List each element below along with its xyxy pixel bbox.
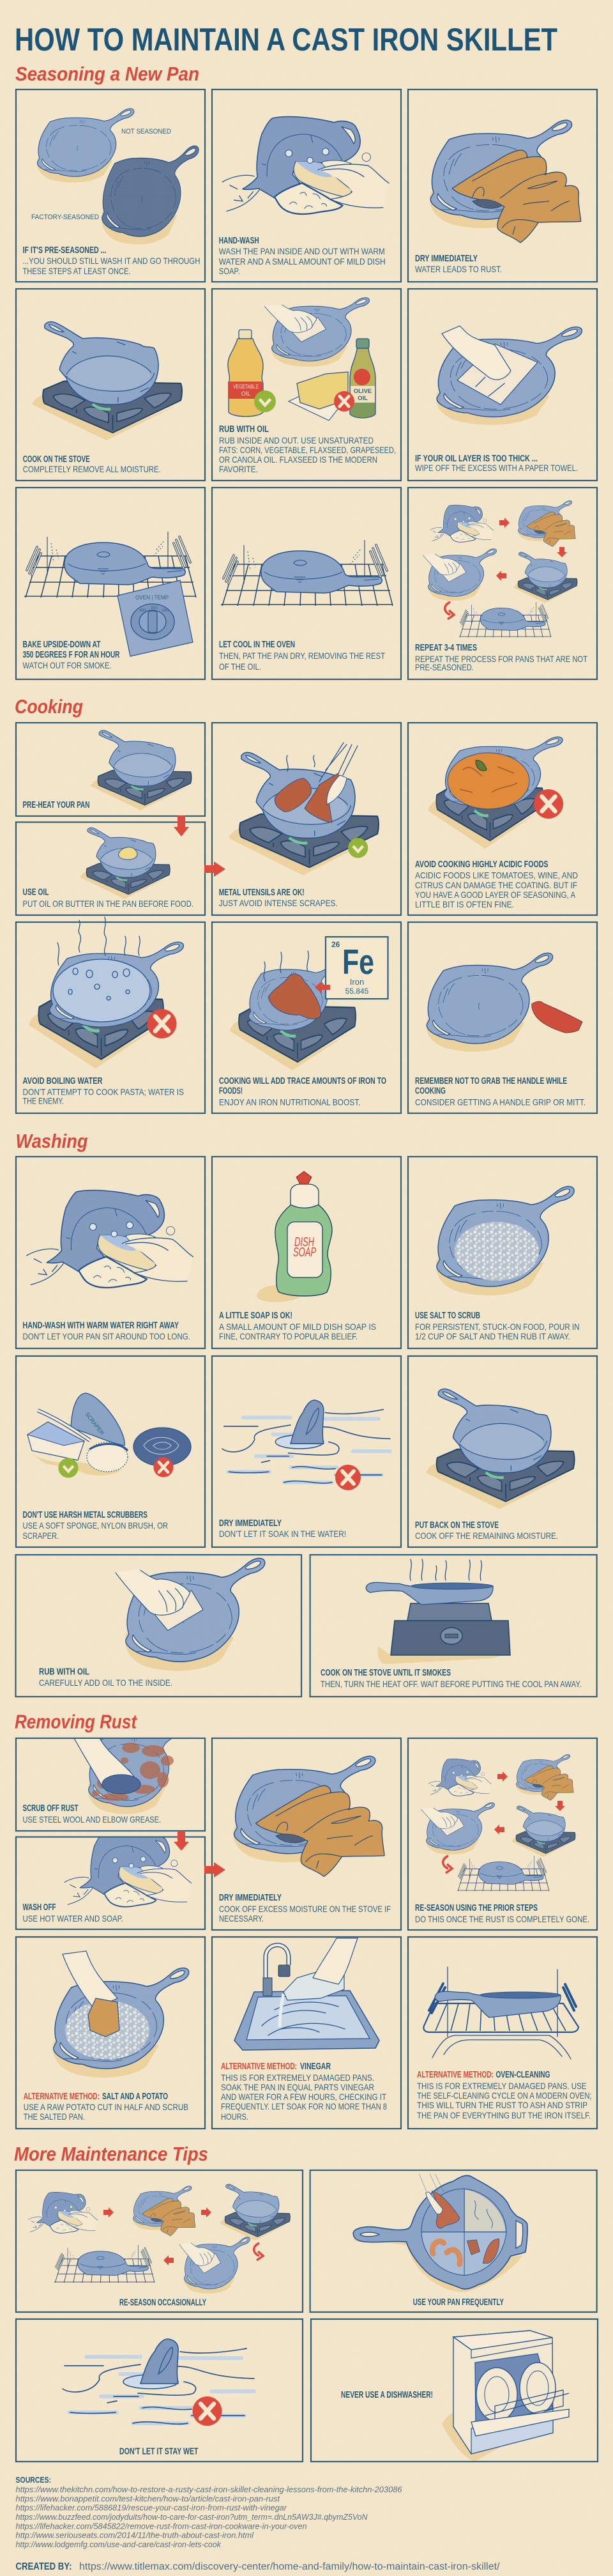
- text: salt: USE SALT TO SCRUB: [415, 1311, 480, 1321]
- text: pre-seasoned step: THESE STEPS AT LEAST ONCE.: [23, 266, 130, 276]
- illustration: oven temperature card: 400: [139, 608, 146, 613]
- text: bake step: WATCH OUT FOR SMOKE.: [23, 660, 111, 670]
- text: oil step: [23, 887, 193, 909]
- illustration: scrubbing a rusty pan: [74, 1739, 174, 1814]
- panel: use oil: [16, 822, 205, 915]
- text: soap: A LITTLE SOAP IS OK!: [219, 1311, 292, 1321]
- text: boiling water: THE ENEMY.: [23, 1095, 64, 1106]
- text: metal utensils: [219, 888, 338, 908]
- text: hand-wash step: WASH THE PAN INSIDE AND OUT WITH WARM: [219, 246, 385, 256]
- text: dry: [219, 1893, 391, 1924]
- text: scrubbers: DON'T USE HARSH METAL SCRUBBERS: [23, 1510, 148, 1520]
- panel: dry immediately: [408, 89, 597, 282]
- text: boiling water: DON'T ATTEMPT TO COOK PASTA; WATER IS: [23, 1086, 184, 1097]
- illustration: tomato sauce in pan on stove: [428, 737, 563, 849]
- text: handle warning: CONSIDER GETTING A HANDLE GRIP OR MITT.: [415, 1097, 586, 1107]
- illustration: pan smoking on stove: [366, 1559, 510, 1664]
- arrow: right to dry: [204, 1862, 225, 1878]
- text: iron benefit: COOKING WILL ADD TRACE AMOUNTS OF IRON TO: [219, 1076, 386, 1086]
- text: repeat step: [415, 643, 587, 672]
- illustration: pan handle sticking out of water: [222, 1400, 390, 1483]
- icon: red x: [153, 1457, 174, 1477]
- panel: cook until it smokes: [310, 1555, 597, 1697]
- panel: scrub off rust: [15, 1737, 206, 1832]
- text: re-season occasionally: RE-SEASON OCCASIONALLY: [119, 2298, 206, 2308]
- text: vinegar: [221, 2062, 387, 2122]
- icon: dish soap bottle: [257, 1171, 332, 1302]
- text: iron benefit: ENJOY AN IRON NUTRITIONAL BOOST.: [219, 1097, 360, 1107]
- text: oil layer step: [415, 454, 578, 473]
- illustration: pan on stove: [426, 1389, 575, 1509]
- text: oven-cleaning: ALTERNATIVE METHOD:: [417, 2070, 494, 2080]
- icon: green check: [348, 838, 368, 858]
- illustration: towel drying pan: [234, 1756, 384, 1876]
- periodic table element: iron: Iron: [350, 977, 364, 987]
- created by credit: CREATED BY:: [15, 2561, 72, 2572]
- text: hand-wash: [23, 1320, 190, 1341]
- text: rub: CAREFULLY ADD OIL TO THE INSIDE.: [39, 1677, 172, 1688]
- illustration: food and tongs in pan on stove: [229, 743, 379, 875]
- illustration: boiling water in pan on stove: [29, 917, 183, 1068]
- text: cool step: LET COOL IN THE OVEN: [219, 640, 295, 650]
- text: rub: RUB WITH OIL: [39, 1667, 89, 1677]
- sources list: https://www.bonappetit.com/test-kitchen/how-to/article/cast-iron-pan-rust: [15, 2494, 280, 2503]
- text: repeat step: REPEAT 3-4 TIMES: [415, 643, 477, 653]
- panel: hand-wash right away: [16, 1157, 205, 1348]
- text: scrub: USE STEEL WOOL AND ELBOW GREASE.: [23, 1814, 161, 1824]
- illustration: oven temperature card: [117, 580, 193, 656]
- panel: re-season occasionally: [16, 2170, 303, 2312]
- text: dry: COOK OFF EXCESS MOISTURE ON THE STOVE IF: [219, 1904, 391, 1914]
- icon: butter block: [289, 372, 348, 420]
- panel: a little soap: [212, 1157, 401, 1348]
- sources list: https://lifehacker.com/5845822/remove-rust-from-cast-iron-cookware-in-your-oven: [15, 2522, 307, 2531]
- text: stay wet: DON'T LET IT STAY WET: [119, 2446, 199, 2456]
- panel: re-season: [408, 1738, 597, 1930]
- text: cook until smoke: [321, 1668, 582, 1689]
- text: pre-heat: PRE-HEAT YOUR PAN: [23, 800, 89, 810]
- text: dry: DRY IMMEDIATELY: [219, 1893, 282, 1903]
- icon: olive oil bottle: OLIVE: [354, 388, 372, 395]
- panel: hand-wash: [212, 89, 401, 282]
- text: iron benefit: FOODS!: [219, 1086, 243, 1097]
- illustration: sink with vinegar being poured: [234, 1938, 379, 2050]
- text: dry step: WATER LEADS TO RUST.: [415, 264, 502, 274]
- icon: red x: [334, 391, 354, 412]
- text: bake step: [23, 640, 120, 670]
- text: potato: THE SALTED PAN.: [24, 2111, 85, 2122]
- text: scrubbers: USE A SOFT SPONGE, NYLON BRUSH, OR: [23, 1520, 168, 1531]
- illustration: pan upside-down on oven rack: [24, 532, 196, 598]
- text: repeat step: PRE-SEASONED.: [415, 662, 474, 672]
- illustration: scrubbing salted pan with a potato: [53, 1951, 189, 2078]
- text: oil step: OR CANOLA OIL. FLAXSEED IS THE MODERN: [219, 454, 377, 465]
- text: stove step: COMPLETELY REMOVE ALL MOISTURE.: [23, 464, 161, 474]
- text: vinegar: AND WATER FOR A FEW HOURS, CHECKING IT: [221, 2092, 386, 2102]
- illustration: not seasoned pan and factory seasoned pan: [37, 109, 199, 245]
- text: oil step: RUB INSIDE AND OUT. USE UNSATURATED: [219, 435, 374, 445]
- panel: use your pan frequently: [310, 2170, 597, 2312]
- text: soap: A SMALL AMOUNT OF MILD DISH SOAP IS: [219, 1322, 376, 1332]
- icon: dish soap bottle: DISH: [294, 1235, 314, 1249]
- periodic table element: iron: [326, 937, 388, 999]
- text: oil step: FAVORITE.: [219, 464, 258, 474]
- text: scrubbers: [23, 1510, 168, 1541]
- text: boiling water: AVOID BOILING WATER: [23, 1076, 103, 1086]
- text: acidic foods: AVOID COOKING HIGHLY ACIDIC FOODS: [415, 860, 549, 870]
- illustration: pan on stove burner: [33, 322, 182, 440]
- text: salt: 1/2 CUP OF SALT AND THEN RUB IT AWAY.: [415, 1331, 570, 1341]
- created by credit: https://www.titlemax.com/discovery-center/home-and-family/how-to-maintain-cast-iron-skillet/: [79, 2561, 500, 2572]
- panel: never use a dishwasher: [311, 2319, 598, 2462]
- text: vinegar: ALTERNATIVE METHOD:: [221, 2062, 297, 2072]
- panel: rub with oil: [212, 289, 401, 481]
- text: pre-seasoned step: IF IT'S PRE-SEASONED ...: [23, 245, 106, 256]
- illustration: dishwasher with plates: [442, 2331, 569, 2461]
- text: metal utensils: JUST AVOID INTENSE SCRAPES.: [219, 898, 338, 908]
- text: soap: [219, 1311, 376, 1341]
- icon: red handle mitt: [532, 1001, 582, 1033]
- text: pre-seasoned step: ...YOU SHOULD STILL WASH IT AND GO THROUGH: [23, 256, 201, 266]
- text: bake step: BAKE UPSIDE-DOWN AT: [23, 640, 101, 650]
- text: oven-cleaning: [417, 2070, 591, 2120]
- text: salt: [415, 1311, 580, 1341]
- panel: if it's pre-seasoned: [16, 89, 205, 282]
- arrow: from iron element to pan: [315, 981, 330, 994]
- panel: too much oil: [408, 289, 597, 481]
- text: soak: [219, 1518, 346, 1539]
- illustration: pan: [426, 953, 553, 1052]
- panel: pre-heat your pan: [16, 723, 205, 816]
- text: oil step: FATS: CORN, VEGETABLE, FLAXSEED, GRAPESEED,: [219, 445, 396, 455]
- icon: red x: [335, 1465, 361, 1490]
- text: wash off: [23, 1902, 123, 1924]
- periodic table element: iron: Fe: [342, 942, 374, 982]
- sources list: http://www.lodgemfg.com/use-and-care/cast-iron-lets-cook: [15, 2540, 222, 2549]
- text: potato: [24, 2092, 188, 2122]
- panel: iron benefit: [212, 922, 401, 1113]
- text: pre-seasoned step: [23, 245, 201, 276]
- heading: washing: Washing: [15, 1130, 88, 1152]
- text: oil step: RUB WITH OIL: [219, 424, 269, 435]
- text: cool step: OF THE OIL.: [219, 661, 261, 672]
- text: stove step: [23, 454, 161, 474]
- illustration: washing the pan: [64, 1833, 192, 1907]
- pan labels: [31, 128, 171, 221]
- text: use frequently: USE YOUR PAN FREQUENTLY: [413, 2297, 504, 2308]
- periodic table element: iron: 55.845: [345, 987, 369, 996]
- text: oil step: USE OIL: [23, 887, 49, 897]
- icon: red x: [534, 789, 563, 819]
- periodic table element: iron: 26: [331, 940, 340, 949]
- illustration: towel drying the pan: [430, 120, 581, 243]
- text: oil layer step: IF YOUR OIL LAYER IS TOO THICK ...: [415, 454, 538, 464]
- panel: handle warning: [408, 922, 597, 1113]
- text: scrub: SCRUB OFF RUST: [23, 1803, 79, 1814]
- text: potato: USE A RAW POTATO CUT IN HALF AND SCRUB: [24, 2102, 188, 2112]
- text: wash off: USE HOT WATER AND SOAP.: [23, 1913, 123, 1924]
- text: soak: DRY IMMEDIATELY: [219, 1518, 282, 1529]
- illustration: seasoning cycle: [423, 500, 577, 637]
- illustration: pan with salt: [436, 1187, 574, 1295]
- heading: removing rust: Removing Rust: [15, 1710, 137, 1733]
- text: handle warning: COOKING: [415, 1086, 446, 1097]
- text: acidic foods: CITRUS CAN DAMAGE THE COATING. BUT IF: [415, 880, 577, 890]
- text: acidic foods: LITTLE BIT IS OFTEN FINE.: [415, 899, 514, 909]
- illustration: pan on rack in self-cleaning oven: [423, 1967, 579, 2059]
- illustration: oven temperature card: 350: [151, 606, 158, 610]
- text: salt: FOR PERSISTENT, STUCK-ON FOOD, POUR IN: [415, 1322, 580, 1332]
- text: hand-wash step: SOAP.: [219, 266, 240, 276]
- illustration: hand rubbing oil into pan: [116, 1558, 265, 1671]
- text: oven-cleaning: OVEN-CLEANING: [496, 2070, 550, 2080]
- icon: red x: [193, 2396, 222, 2426]
- illustration: seasoning cycle: [421, 1754, 575, 1891]
- panel: vinegar: [212, 1937, 401, 2129]
- icon: olive oil bottle: OIL: [358, 395, 368, 402]
- illustration: oven temperature card: 300: [162, 608, 169, 613]
- icon: vegetable oil bottle: OIL: [241, 390, 250, 397]
- text: vinegar: SOAK THE PAN IN EQUAL PARTS VINEGAR: [221, 2082, 374, 2092]
- icon: green check: [58, 1458, 79, 1478]
- panel: avoid boiling water: [16, 917, 205, 1113]
- text: dishwasher: NEVER USE A DISHWASHER!: [341, 2390, 433, 2400]
- text: dry step: DRY IMMEDIATELY: [415, 254, 478, 264]
- illustration: butter melting in pan on stove: [80, 828, 170, 899]
- text: re-season: RE-SEASON USING THE PRIOR STEPS: [415, 1903, 538, 1913]
- pan labels: FACTORY-SEASONED: [31, 213, 99, 221]
- text: boiling water: [23, 1076, 184, 1106]
- text: vinegar: VINEGAR: [300, 2062, 331, 2072]
- icon: vegetable oil bottle: VEGETABLE: [233, 383, 259, 390]
- text: stove step: COOK ON THE STOVE: [23, 454, 90, 465]
- text: handle warning: [415, 1076, 586, 1107]
- text: soap: FINE, CONTRARY TO POPULAR BELIEF.: [219, 1331, 358, 1341]
- illustration: oven temperature card: OVEN | TEMP: [135, 594, 169, 601]
- text: oil step: [219, 424, 396, 474]
- icon: steel wool: [133, 1428, 191, 1466]
- text: oil layer step: WIPE OFF THE EXCESS WITH A PAPER TOWEL.: [415, 463, 578, 473]
- panel: don't let it stay wet: [16, 2319, 303, 2462]
- panel: don't soak: [212, 1356, 401, 1547]
- text: acidic foods: [415, 860, 578, 909]
- illustration: pan cooling on oven rack: [221, 540, 393, 606]
- text: hand-wash step: [219, 236, 386, 276]
- icon: dish soap bottle: SOAP: [293, 1246, 316, 1260]
- icon: green check: [254, 390, 276, 412]
- panel: metal utensils: [212, 723, 401, 915]
- text: scrubbers: SCRAPER.: [23, 1531, 59, 1541]
- text: dry step: [415, 254, 502, 274]
- text: wash off: WASH OFF: [23, 1902, 56, 1913]
- pan labels: NOT SEASONED: [121, 128, 171, 135]
- text: potato: SALT AND A POTATO: [102, 2092, 168, 2102]
- text: metal utensils: METAL UTENSILS ARE OK!: [219, 888, 305, 898]
- icon: red x: [147, 1009, 176, 1038]
- heading: more maintenance tips: More Maintenance Tips: [14, 2143, 208, 2165]
- arrow: down to wash off: [174, 1831, 189, 1851]
- illustration: washing the pan: [27, 1191, 193, 1288]
- panel: bake upside-down: [16, 488, 205, 679]
- text: bake step: 350 DEGREES F FOR AN HOUR: [23, 650, 120, 660]
- text: soak: DON'T LET IT SOAK IN THE WATER!: [219, 1529, 346, 1539]
- sources list: http://www.seriouseats.com/2014/11/the-truth-about-cast-iron.html: [15, 2531, 254, 2540]
- illustration: pan with varied foods: [353, 2174, 527, 2292]
- text: stove: [415, 1520, 558, 1541]
- panel: cook on the stove: [16, 289, 205, 481]
- panel: put back on the stove: [408, 1356, 597, 1547]
- panel: use salt to scrub: [408, 1157, 597, 1348]
- illustration: re-seasoning steps sequence: [28, 2184, 290, 2294]
- text: hand-wash step: HAND-WASH: [219, 236, 259, 246]
- panel: dry immediately rust: [212, 1738, 401, 1930]
- text: potato: ALTERNATIVE METHOD:: [24, 2092, 100, 2102]
- text: re-season: [415, 1903, 589, 1924]
- sources list: https://www.buzzfeed.com/jodyduits/how-to-care-for-cast-iron?utm_term=.dnLn5AW3J#.qbymZ5VoN: [15, 2513, 368, 2522]
- text: vinegar: FREQUENTLY. LET SOAK FOR NO MORE THAN 8: [221, 2101, 387, 2111]
- text: vinegar: HOURS.: [221, 2111, 248, 2122]
- text: hand-wash: DON'T LET YOUR PAN SIT AROUND TOO LONG.: [23, 1331, 190, 1341]
- text: stove: PUT BACK ON THE STOVE: [415, 1520, 499, 1531]
- panel: avoid acidic foods: [408, 723, 597, 915]
- text: rub: [39, 1667, 172, 1688]
- text: oil step: PUT OIL OR BUTTER IN THE PAN BEFORE FOOD.: [23, 899, 193, 909]
- illustration: pan with paper towel and hand: [436, 326, 582, 425]
- heading: cooking: Cooking: [15, 695, 83, 718]
- text: vinegar: THIS IS FOR EXTREMELY DAMAGED PANS.: [221, 2072, 374, 2083]
- text: scrub: [23, 1803, 161, 1824]
- illustration: washing the pan with a sponge: [222, 117, 389, 214]
- panel: no harsh scrubbers: [16, 1356, 205, 1547]
- text: acidic foods: YOU HAVE A GOOD LAYER OF SEASONING, A: [415, 890, 576, 900]
- text: iron benefit: [219, 1076, 386, 1107]
- icon: vegetable oil bottle: [228, 330, 263, 417]
- sources list: https://www.thekitchn.com/how-to-restore-a-rusty-cast-iron-skillet-cleaning-lessons-from-the-kitchn-203086: [15, 2485, 402, 2494]
- text: acidic foods: ACIDIC FOODS LIKE TOMATOES, WINE, AND: [415, 870, 578, 881]
- sources list: https://lifehacker.com/5886819/rescue-your-cast-iron-from-rust-with-vinegar: [15, 2504, 287, 2513]
- heading: seasoning a new pan: Seasoning a New Pan: [15, 63, 199, 85]
- text: cook until smoke: COOK ON THE STOVE UNTIL IT SMOKES: [321, 1668, 451, 1678]
- text: oven-cleaning: THIS WILL TURN THE RUST TO ASH AND STRIP: [417, 2100, 587, 2110]
- panel: salt and a potato: [16, 1937, 205, 2129]
- icon: olive oil bottle: [350, 339, 375, 418]
- text: cool step: [219, 640, 385, 672]
- text: stove: COOK OFF THE REMAINING MOISTURE.: [415, 1531, 558, 1541]
- illustration: food in pan on stove: [230, 951, 356, 1070]
- panel: let cool in the oven: [212, 488, 401, 679]
- sources list: SOURCES:: [15, 2475, 51, 2485]
- panel: repeat 3-4 times: [408, 488, 597, 679]
- panel: oven-cleaning: [408, 1937, 597, 2129]
- arrow: down to use oil: [174, 815, 189, 837]
- illustration: scraper, sponge and brush: SCRAPER: [84, 1411, 105, 1437]
- text: hand-wash: HAND-WASH WITH WARM WATER RIGHT AWAY: [23, 1320, 179, 1330]
- panel: wash off: [16, 1833, 205, 1929]
- text: cool step: THEN, PAT THE PAN DRY, REMOVING THE REST: [219, 651, 385, 661]
- illustration: pan handle in water: [63, 2339, 254, 2424]
- arrow: right to metal utensils: [204, 861, 225, 877]
- panel: rub with oil wide: [15, 1555, 301, 1697]
- illustration: scraper, sponge and brush: [27, 1393, 128, 1476]
- illustration: pan preheating on stove: [91, 730, 192, 810]
- illustration: rubbing oil inside the pan: [264, 298, 369, 367]
- text: dry: NECESSARY.: [219, 1913, 264, 1924]
- sources list: [15, 2475, 402, 2549]
- text: hand-wash step: WATER AND A SMALL AMOUNT OF MILD DISH: [219, 256, 386, 266]
